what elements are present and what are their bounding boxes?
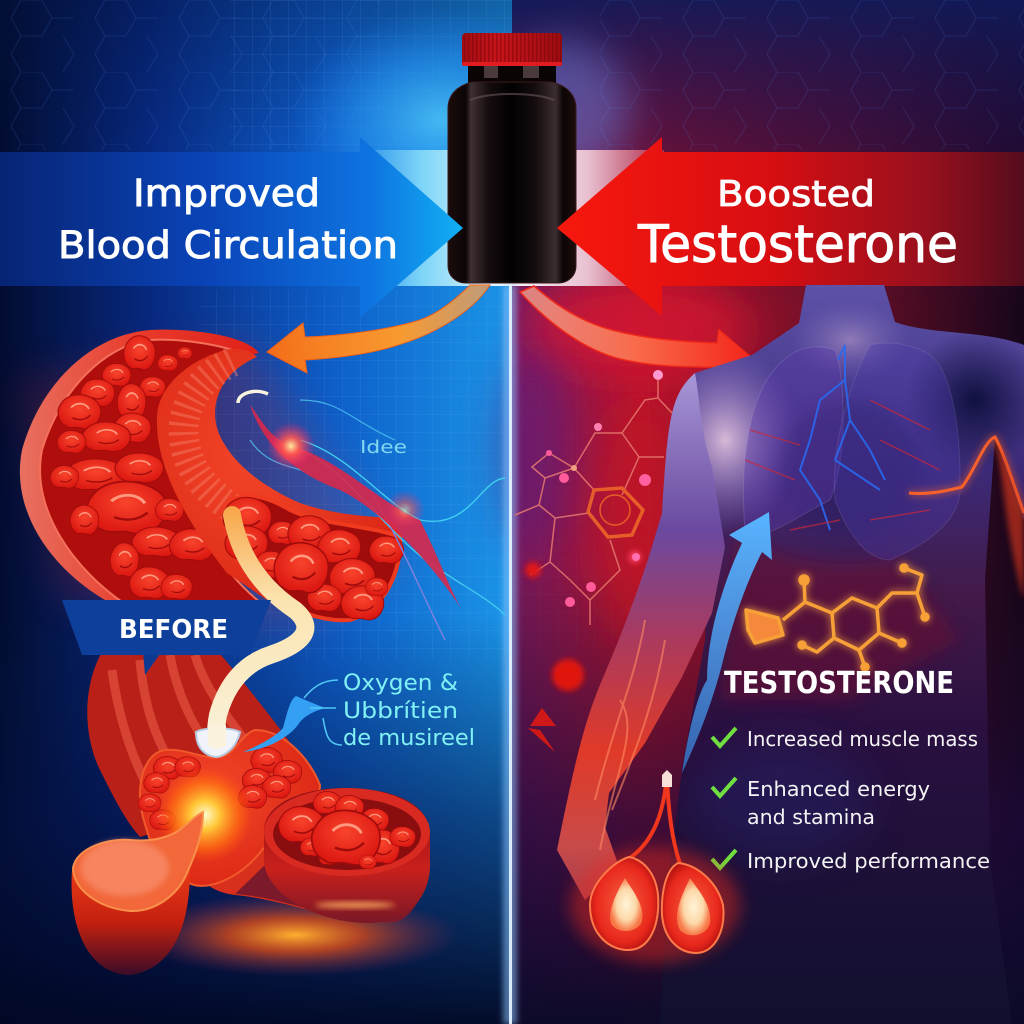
blue upward arrow (682, 512, 772, 773)
benefit: enhanced energy and stamina: Enhanced energy (747, 777, 930, 801)
illustration: blood vessel cross sections (20, 330, 404, 630)
arrow: improved blood circulation (0, 137, 463, 318)
curved artery tube (157, 349, 402, 613)
torso shading (692, 309, 1024, 866)
connector body under drum (196, 800, 430, 922)
before banner: BEFORE (119, 615, 228, 645)
molecule dots (525, 370, 663, 752)
label: oxygen text: Oxygen & (343, 671, 458, 696)
benefit: enhanced energy and stamina: and stamina (747, 805, 875, 829)
orange flank glow line (909, 437, 1024, 513)
red blood cells in large vessel (50, 336, 215, 599)
cream flow channel (196, 515, 305, 757)
small blue pointer (243, 696, 325, 752)
ember ground (130, 893, 460, 977)
testosterone benefits (712, 666, 990, 873)
label: oxygen text: Ubbrítien (343, 699, 458, 724)
benefit: improved performance: Improved performance (747, 849, 990, 873)
heading: boosted testosterone: Testosterone (637, 215, 958, 275)
curved arrow: bottle to blood vessel (267, 285, 490, 373)
heading: improved blood circulation: Blood Circulation (58, 224, 398, 267)
label: oxygen text (304, 671, 475, 751)
large vessel section (20, 330, 262, 604)
benefit: increased muscle mass: Increased muscle mass (747, 727, 978, 751)
illustration: lower vessel and organ (72, 650, 460, 977)
vessels in chest (800, 345, 885, 530)
label: oxygen text: de musireel (343, 726, 475, 751)
narrowed section with cells (227, 496, 400, 620)
heading: boosted testosterone: Boosted (717, 174, 875, 215)
glow behind vessel (20, 340, 400, 630)
left end tube (72, 870, 190, 975)
center divider (503, 285, 517, 1024)
arrow: boosted testosterone (557, 137, 1024, 316)
central vessel cross section (140, 730, 320, 886)
background: right red panel (490, 0, 1024, 1024)
torso silhouette (660, 285, 1024, 1024)
left arm (557, 373, 725, 900)
right open cross section drum (264, 788, 430, 923)
small garbled label: idee: Idee (360, 437, 407, 458)
illustration: human torso (557, 285, 1024, 950)
supplement bottle (448, 33, 576, 283)
benzene ring (588, 488, 643, 537)
benefit: enhanced energy and stamina (712, 777, 930, 829)
before banner (62, 600, 271, 675)
curved arrow: bottle to torso (520, 286, 754, 380)
label: testosterone: TESTOSTERONE (724, 666, 954, 701)
right arm edge glow (998, 440, 1024, 600)
heading: improved blood circulation: Improved (133, 172, 320, 215)
nerve lines and sparks (238, 391, 505, 640)
illustration: glowing glands (570, 770, 740, 963)
background: left blue panel (0, 0, 590, 1024)
testosterone molecule icon (746, 565, 928, 670)
muscle fan (87, 650, 320, 837)
center light band behind bottle (360, 150, 664, 286)
lung outlines (743, 347, 843, 535)
molecule network left of torso (515, 375, 672, 625)
